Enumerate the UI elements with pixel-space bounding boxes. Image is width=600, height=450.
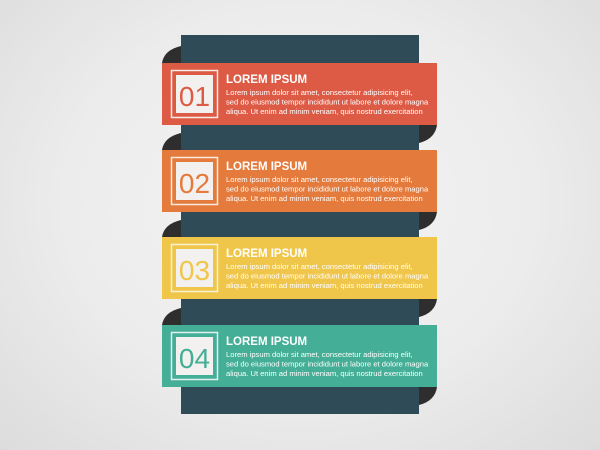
text 4 <box>226 336 429 378</box>
number box 03 <box>172 244 218 292</box>
text 2: aliqua. Ut enim ad minim veniam, quis nostrud exercitation <box>226 194 423 203</box>
text 2: Lorem ipsum dolor sit amet, consectetur adipisicing elit, <box>226 175 413 184</box>
text 4: Lorem ipsum dolor sit amet, consectetur adipisicing elit, <box>226 350 413 359</box>
text 1: Lorem ipsum dolor sit amet, consectetur adipisicing elit, <box>226 88 413 97</box>
number box 04: 04 <box>179 343 210 374</box>
text 3 <box>226 248 429 290</box>
number box 04 <box>172 332 218 380</box>
number box 02: 02 <box>179 168 210 199</box>
text 3: sed do eiusmod tempor incididunt ut labore et dolore magna <box>226 272 429 280</box>
text 1: LOREM IPSUM <box>226 74 307 86</box>
text 1: aliqua. Ut enim ad minim veniam, quis nostrud exercitation <box>226 107 423 116</box>
text 4: aliqua. Ut enim ad minim veniam, quis nostrud exercitation <box>226 369 423 378</box>
number box 03: 03 <box>179 255 210 286</box>
text 3: aliqua. Ut enim ad minim veniam, quis nostrud exercitation <box>226 281 423 290</box>
text 2: LOREM IPSUM <box>226 161 307 173</box>
curl right 1 <box>419 125 437 143</box>
curl left 2 <box>162 133 181 150</box>
number box 01 <box>172 70 218 118</box>
number box 01: 01 <box>179 81 210 112</box>
ribbon 2 <box>162 133 437 230</box>
curl right 3 <box>419 299 437 317</box>
text 2 <box>226 161 429 203</box>
number box 02 <box>172 158 218 204</box>
text 1: sed do eiusmod tempor incididunt ut labore et dolore magna <box>226 98 429 106</box>
curl left 1 <box>162 46 181 63</box>
curl right 2 <box>419 212 437 230</box>
ribbon 3 <box>162 220 437 317</box>
text 2: sed do eiusmod tempor incididunt ut labore et dolore magna <box>226 184 429 194</box>
dark backing panel <box>181 35 419 414</box>
text 4: sed do eiusmod tempor incididunt ut labore et dolore magna <box>226 360 429 368</box>
curl left 3 <box>162 220 181 237</box>
text 4: LOREM IPSUM <box>226 336 307 348</box>
ribbon 4 <box>162 308 437 405</box>
curl left 4 <box>162 308 181 325</box>
curl right 4 <box>419 387 437 405</box>
text 3: Lorem ipsum dolor sit amet, consectetur adipisicing elit, <box>226 262 413 271</box>
text 1 <box>226 74 429 116</box>
ribbon 1 <box>162 46 437 143</box>
text 3: LOREM IPSUM <box>226 248 307 260</box>
